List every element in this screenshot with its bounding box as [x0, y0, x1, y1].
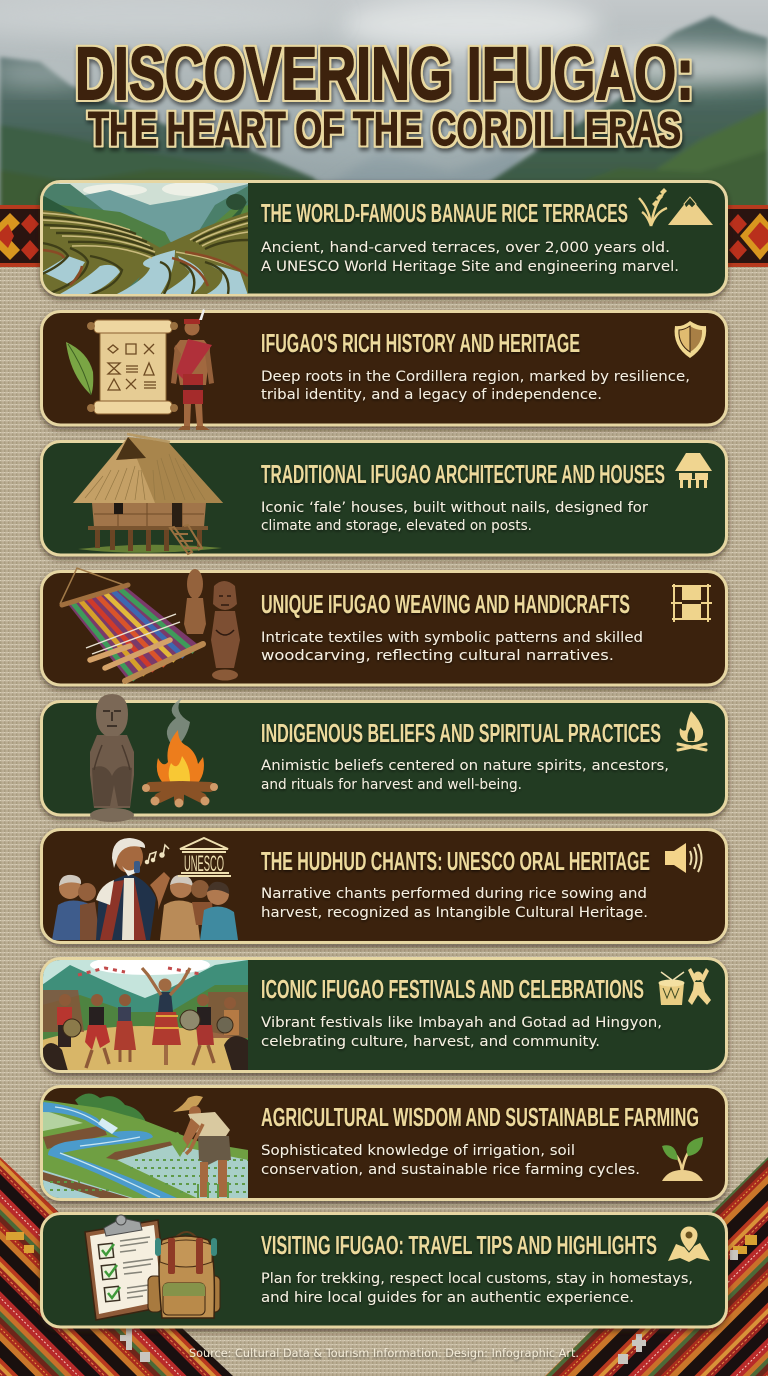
icon: house	[675, 453, 712, 488]
panel: Banaue rice terraces	[42, 182, 726, 295]
icon: sprout	[662, 1137, 703, 1181]
woven textile corner left	[0, 1157, 233, 1376]
illustration: clipboard and backpack	[85, 1215, 220, 1320]
illustration: scroll, leaf and Ifugao man	[66, 309, 214, 430]
heading: IFUGAO'S RICH HISTORY AND HERITAGE	[261, 328, 580, 358]
description: conservation, and sustainable rice farming cycles.	[261, 1161, 640, 1178]
illustration: festival dancers	[42, 955, 248, 1071]
description: Plan for trekking, respect local customs, stay in homestays,	[261, 1270, 693, 1287]
panel: architecture and houses	[42, 434, 726, 555]
illustration: campfire	[142, 698, 218, 808]
description: and hire local guides for an authentic experience.	[261, 1289, 634, 1306]
illustration: chanter and community	[52, 838, 238, 940]
carving: large figure	[211, 581, 240, 680]
panel: weaving and handicrafts	[42, 568, 726, 685]
illustration: rice terraces	[42, 182, 248, 295]
description: Iconic ‘fale’ houses, built without nails, designed for	[261, 499, 648, 516]
description: A UNESCO World Heritage Site and engineering marvel.	[261, 258, 679, 275]
icon: drum and dancer	[658, 968, 711, 1005]
description: and rituals for harvest and well-being.	[261, 776, 522, 793]
music notes	[146, 845, 169, 864]
icon: map pin	[668, 1226, 710, 1262]
icon: shield	[675, 321, 706, 358]
description	[261, 499, 648, 534]
panel: festivals and celebrations	[42, 955, 726, 1072]
icon: fire	[678, 711, 706, 750]
illustration: farmer and irrigation	[43, 1093, 248, 1200]
description	[261, 757, 669, 793]
description: Narrative chants performed during rice sowing and	[261, 885, 647, 902]
illustration: Ifugao house	[73, 434, 223, 554]
description: woodcarving, reflecting cultural narratives.	[261, 647, 614, 664]
description: celebrating culture, harvest, and community.	[261, 1033, 600, 1050]
woven band right	[727, 205, 768, 267]
figure: man	[171, 309, 214, 430]
description	[261, 239, 679, 275]
icon: loom	[671, 584, 712, 622]
illustration: backstrap loom	[60, 568, 240, 681]
panel: agricultural wisdom	[42, 1086, 726, 1200]
description	[261, 1270, 693, 1306]
description	[261, 1142, 640, 1178]
description	[261, 1014, 662, 1050]
icon: rice and mountain	[639, 188, 713, 226]
source line: Source: Cultural Data & Tourism Information. Design: Infographic Art.	[189, 1346, 579, 1360]
icon: UNESCO temple	[178, 838, 231, 876]
figure: farmer	[166, 1096, 231, 1197]
description: climate and storage, elevated on posts.	[261, 517, 532, 534]
description: Sophisticated knowledge of irrigation, soil	[261, 1142, 575, 1159]
woven textile corner right	[545, 1157, 768, 1376]
description: Vibrant festivals like Imbayah and Gotad ad Hingyon,	[261, 1014, 662, 1031]
description	[261, 629, 643, 664]
panel: Hudhud chants	[42, 830, 726, 942]
mountain backdrop	[0, 0, 768, 212]
woven band left	[0, 205, 41, 267]
icon: speaker	[665, 843, 702, 873]
panel: beliefs and spiritual practices	[42, 694, 726, 822]
illustration: bulul statue	[90, 694, 134, 822]
description	[261, 885, 648, 921]
carving: small figure	[184, 569, 206, 634]
description: harvest, recognized as Intangible Cultural Heritage.	[261, 904, 648, 921]
description: Intricate textiles with symbolic patterns and skilled	[261, 629, 643, 646]
description: Ancient, hand-carved terraces, over 2,000 years old.	[261, 239, 670, 256]
panel: travel tips	[42, 1214, 726, 1327]
description: tribal identity, and a legacy of independence.	[261, 386, 602, 403]
description	[261, 368, 690, 403]
title	[75, 32, 694, 155]
description: Animistic beliefs centered on nature spirits, ancestors,	[261, 757, 669, 774]
description: Deep roots in the Cordillera region, marked by resilience,	[261, 368, 690, 385]
panel: Hudhud chants: UNESCO	[184, 851, 224, 876]
panel: history and heritage	[42, 309, 726, 430]
